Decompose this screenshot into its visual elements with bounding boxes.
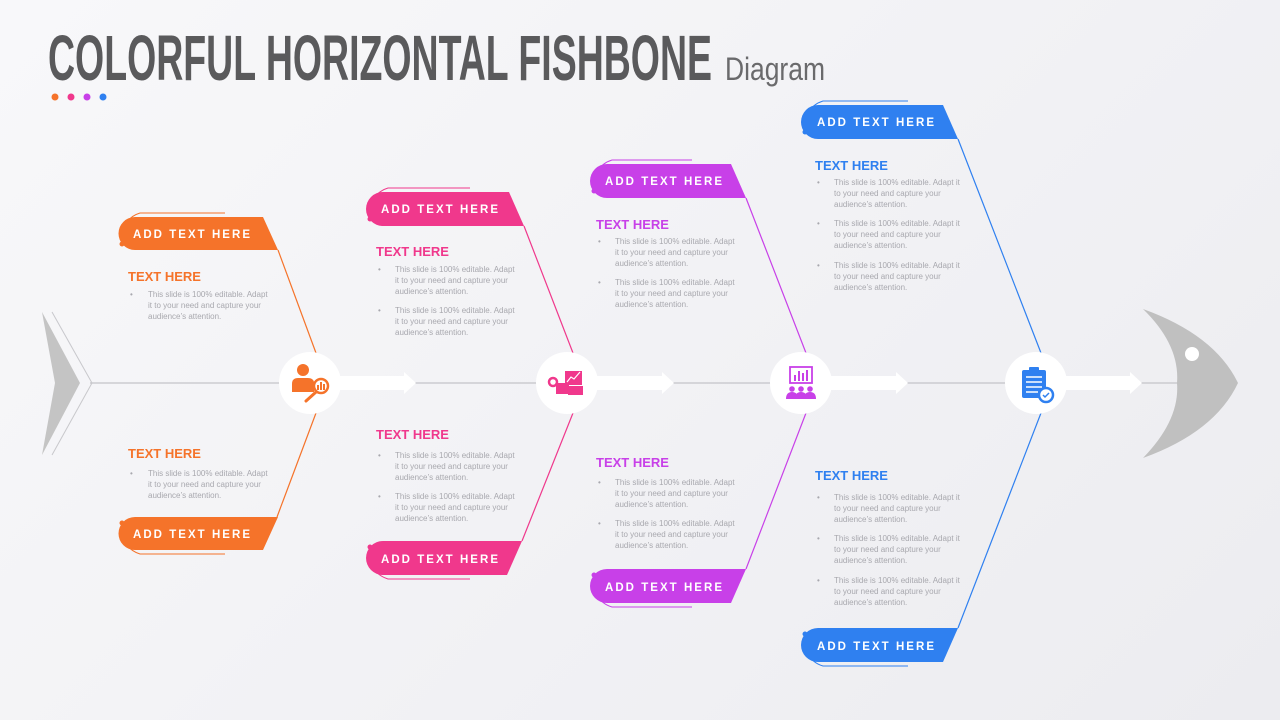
pink top text: • (378, 306, 381, 315)
blue top bar (801, 101, 958, 139)
pink bottom text: it to your need and capture your (395, 462, 508, 471)
purple bottom text: This slide is 100% editable. Adapt (615, 478, 735, 487)
blue bottom text: • (817, 576, 820, 585)
pink top bar: ADD TEXT HERE (381, 204, 498, 216)
pink top text: TEXT HERE (376, 244, 449, 259)
pink bottom text: This slide is 100% editable. Adapt (395, 492, 515, 501)
blue bottom text: audience’s attention. (834, 515, 907, 524)
pink bottom text: audience’s attention. (395, 473, 468, 482)
pink bottom text: audience’s attention. (395, 514, 468, 523)
title: Diagram (725, 51, 825, 87)
orange bottom bar: ADD TEXT HERE (133, 529, 250, 541)
blue top text: to your need and capture your (834, 272, 941, 281)
pink top text: audience’s attention. (395, 287, 468, 296)
blue bottom bar: ADD TEXT HERE (817, 641, 934, 653)
pink bottom bar: ADD TEXT HERE (381, 554, 498, 566)
blue bottom text: to your need and capture your (834, 504, 941, 513)
icon: presentation (purple circle) (770, 352, 832, 414)
purple top text: audience’s attention. (615, 300, 688, 309)
spine (90, 382, 1180, 384)
orange top bar (118, 213, 278, 250)
color dots (52, 94, 106, 100)
purple bottom text: • (598, 478, 601, 487)
orange top text: This slide is 100% editable. Adapt (148, 290, 268, 299)
fish tail (42, 312, 92, 455)
pink top text: This slide is 100% editable. Adapt (395, 265, 515, 274)
blue bottom bar (801, 628, 958, 666)
blue bottom text: • (817, 493, 820, 502)
blue bottom text: This slide is 100% editable. Adapt it (834, 493, 961, 502)
blue bottom text: to your need and capture your (834, 587, 941, 596)
pink top text: • (378, 265, 381, 274)
purple bottom text: it to your need and capture your (615, 489, 728, 498)
blue bottom text (815, 468, 961, 607)
blue top text: audience’s attention. (834, 200, 907, 209)
blue bottom text: TEXT HERE (815, 468, 888, 483)
orange top text: audience’s attention. (148, 312, 221, 321)
orange bottom text: TEXT HERE (128, 446, 201, 461)
purple bottom text: This slide is 100% editable. Adapt (615, 519, 735, 528)
purple top text: This slide is 100% editable. Adapt (615, 237, 735, 246)
orange bottom bar (118, 517, 278, 554)
blue top text: to your need and capture your (834, 189, 941, 198)
pink bottom text: it to your need and capture your (395, 503, 508, 512)
pink top bar (366, 188, 524, 226)
pink top text: it to your need and capture your (395, 317, 508, 326)
orange top text (128, 269, 268, 321)
panel: purple (590, 160, 806, 607)
purple bottom text: audience’s attention. (615, 541, 688, 550)
purple bottom bar: ADD TEXT HERE (605, 582, 722, 594)
purple top text: This slide is 100% editable. Adapt (615, 278, 735, 287)
pink bottom text: TEXT HERE (376, 427, 449, 442)
blue top text: This slide is 100% editable. Adapt it (834, 261, 961, 270)
blue top bar: ADD TEXT HERE (817, 117, 934, 129)
pink bottom text (376, 427, 515, 523)
purple bottom text: • (598, 519, 601, 528)
orange top text: • (130, 290, 133, 299)
blue bottom text: • (817, 534, 820, 543)
orange bottom text: it to your need and capture your (148, 480, 261, 489)
orange bottom text: audience’s attention. (148, 491, 221, 500)
purple bottom text (596, 455, 735, 550)
pink bottom text: • (378, 492, 381, 501)
blue bottom text: This slide is 100% editable. Adapt it (834, 576, 961, 585)
pink bottom text: • (378, 451, 381, 460)
purple top text: • (598, 278, 601, 287)
blue top text: • (817, 219, 820, 228)
orange bottom text: • (130, 469, 133, 478)
blue top text: • (817, 178, 820, 187)
purple bottom text: it to your need and capture your (615, 530, 728, 539)
blue top text: audience’s attention. (834, 283, 907, 292)
blue top text (815, 158, 961, 292)
icon: business growth (pink circle) (536, 352, 598, 414)
purple bottom bar (590, 569, 746, 607)
arrows (330, 372, 1142, 394)
purple top bar: ADD TEXT HERE (605, 176, 722, 188)
pink top text: audience’s attention. (395, 328, 468, 337)
orange bottom text: This slide is 100% editable. Adapt (148, 469, 268, 478)
blue bottom text: This slide is 100% editable. Adapt it (834, 534, 961, 543)
orange top text: it to your need and capture your (148, 301, 261, 310)
fish head (1143, 309, 1238, 458)
panel: pink (366, 188, 573, 579)
pink bottom text: This slide is 100% editable. Adapt (395, 451, 515, 460)
purple top bar (590, 160, 746, 198)
blue bottom text: audience’s attention. (834, 556, 907, 565)
blue top text: to your need and capture your (834, 230, 941, 239)
blue bottom text: audience’s attention. (834, 598, 907, 607)
title (48, 22, 825, 94)
title: COLORFUL HORIZONTAL FISHBONE (48, 22, 712, 94)
purple top text: • (598, 237, 601, 246)
orange top text: TEXT HERE (128, 269, 201, 284)
blue top text: TEXT HERE (815, 158, 888, 173)
purple top text: audience’s attention. (615, 259, 688, 268)
orange top bar: ADD TEXT HERE (133, 229, 250, 241)
purple top text: it to your need and capture your (615, 248, 728, 257)
blue bottom text: to your need and capture your (834, 545, 941, 554)
blue top text: audience’s attention. (834, 241, 907, 250)
orange bottom text (128, 446, 268, 500)
purple top text: TEXT HERE (596, 217, 669, 232)
icon: analyst (orange circle) (279, 352, 341, 414)
purple bottom text: audience’s attention. (615, 500, 688, 509)
pink top text (376, 244, 515, 337)
purple bottom text: TEXT HERE (596, 455, 669, 470)
purple top text (596, 217, 735, 309)
icon: clipboard (blue circle) (1005, 352, 1067, 414)
blue top text: • (817, 261, 820, 270)
blue top text: This slide is 100% editable. Adapt it (834, 178, 961, 187)
purple top text: it to your need and capture your (615, 289, 728, 298)
panel: orange (118, 213, 316, 554)
blue top text: This slide is 100% editable. Adapt it (834, 219, 961, 228)
pink top text: This slide is 100% editable. Adapt (395, 306, 515, 315)
pink bottom bar (366, 541, 522, 579)
panel: blue (801, 101, 1041, 666)
pink top text: it to your need and capture your (395, 276, 508, 285)
